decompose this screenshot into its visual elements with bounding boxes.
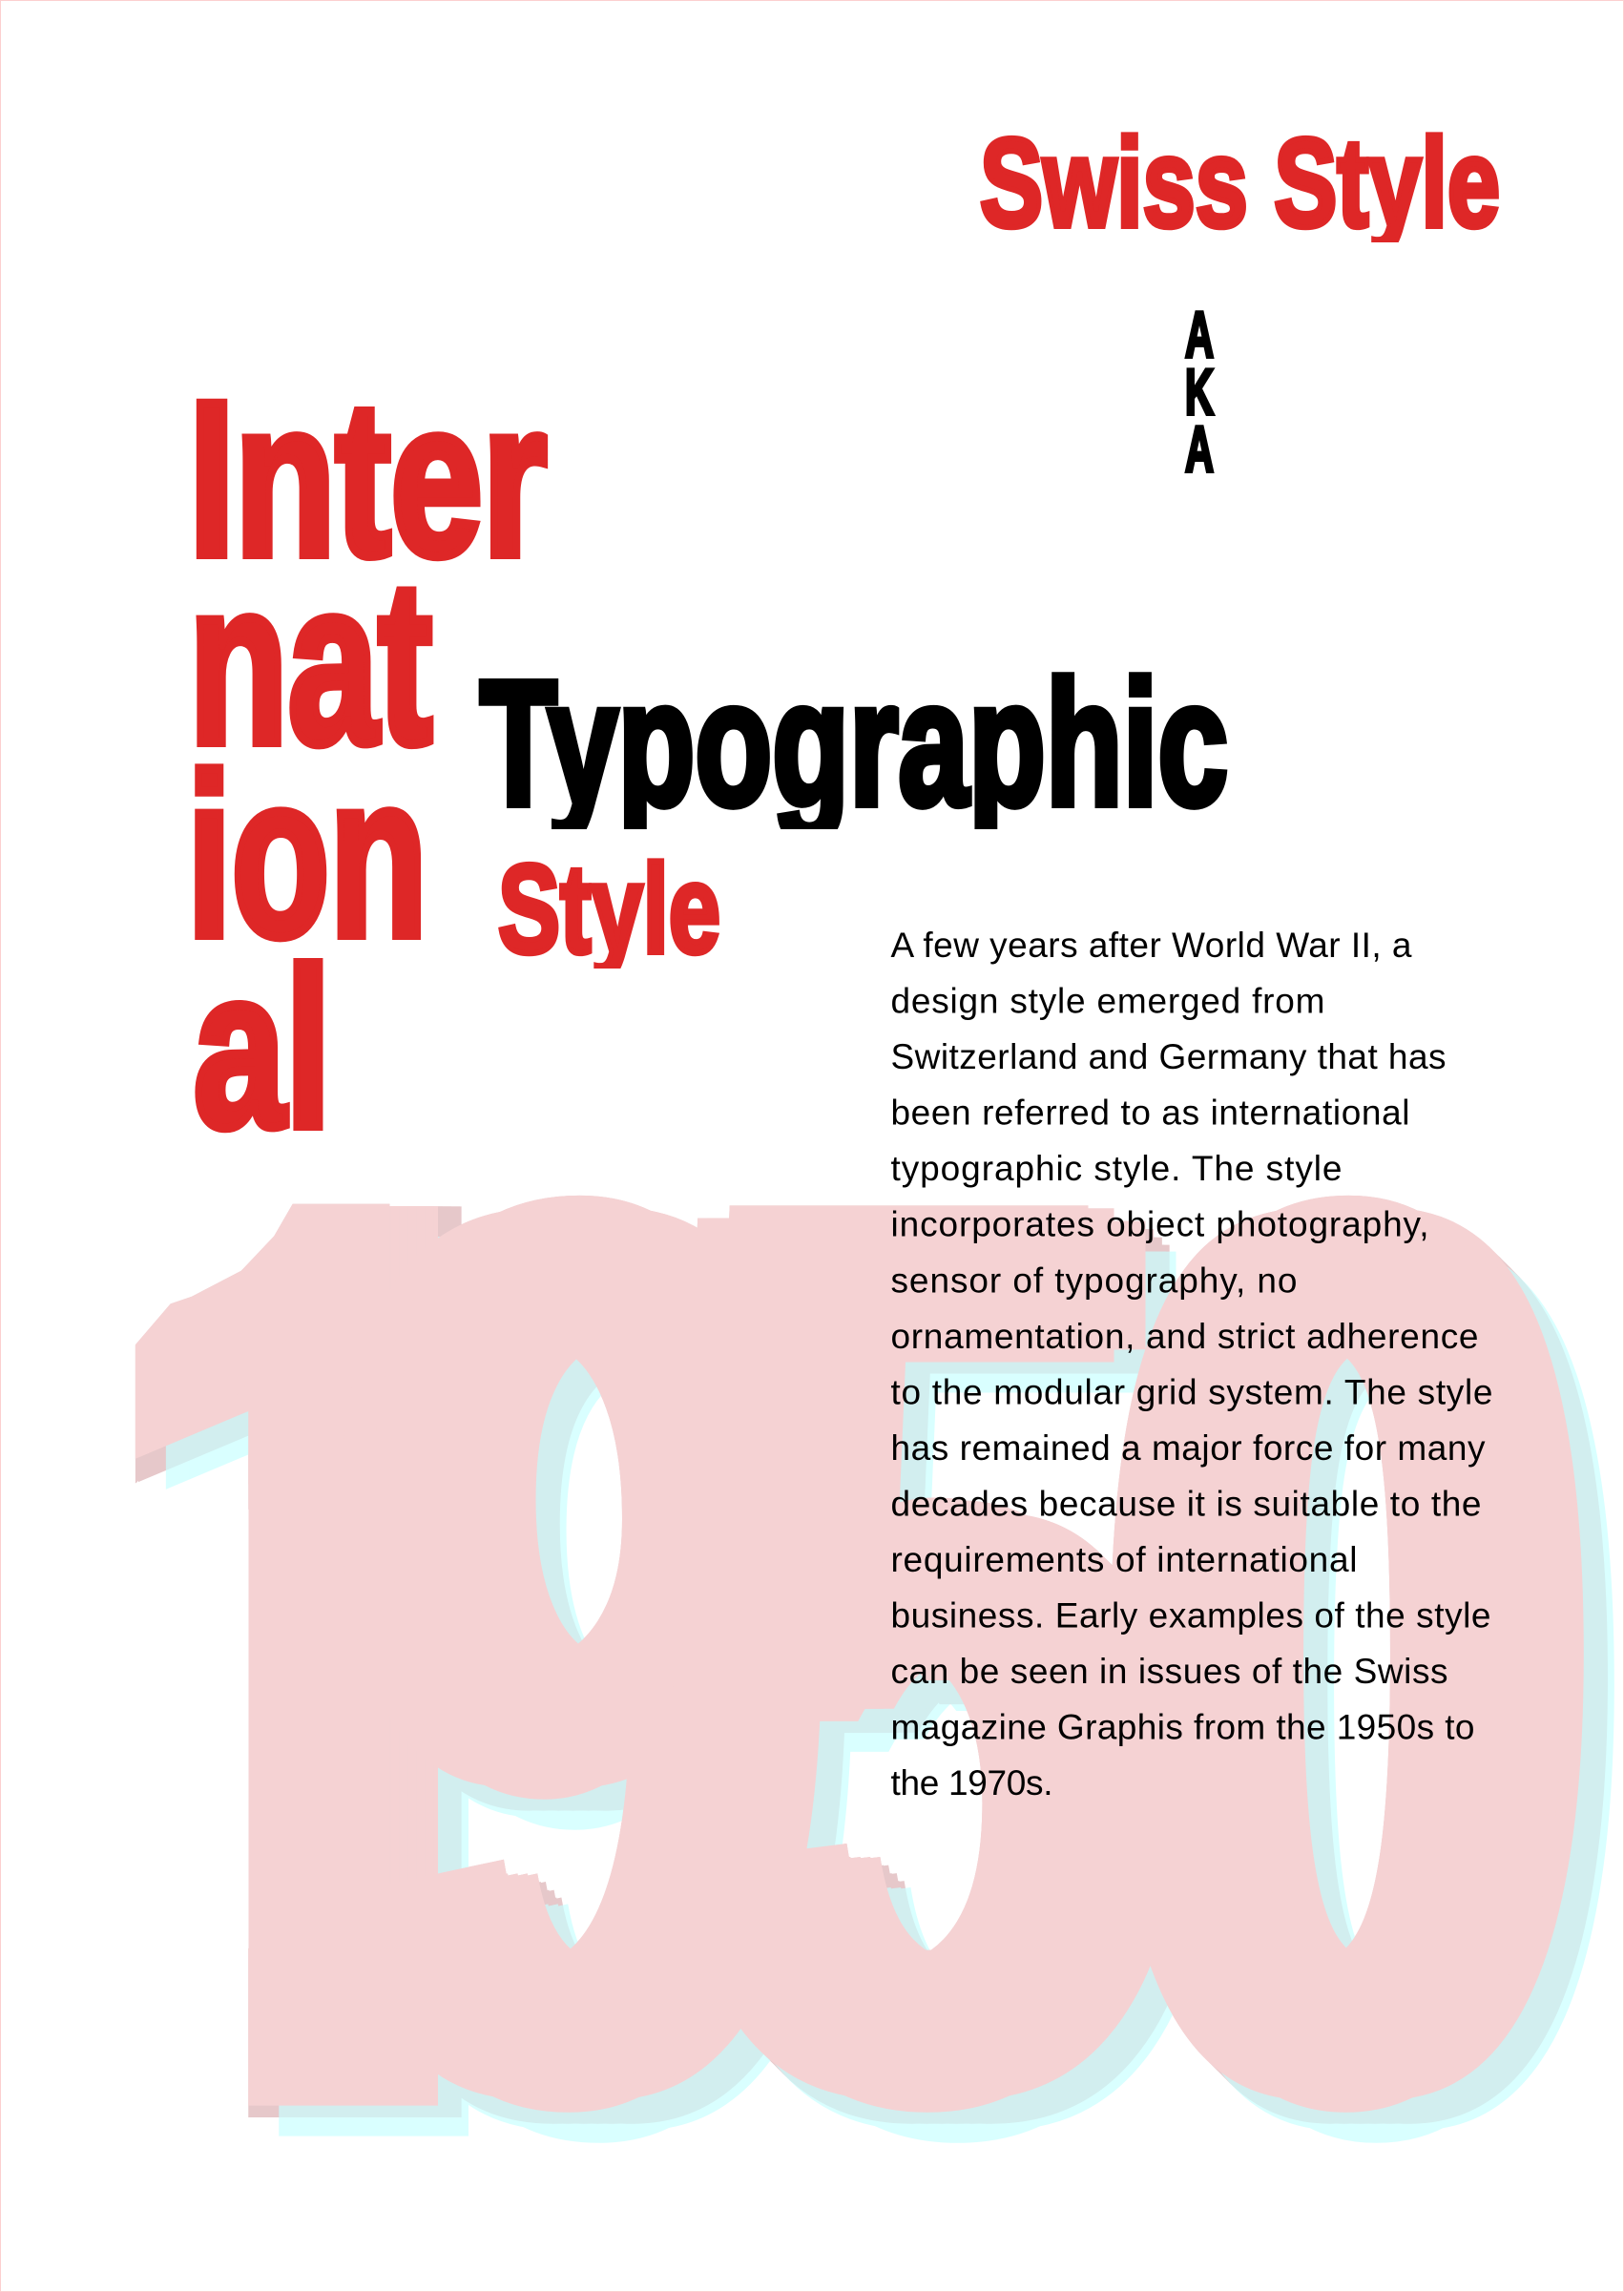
body paragraph: the 1970s. [891, 1763, 1053, 1802]
body paragraph: been referred to as international [891, 1094, 1410, 1133]
body paragraph: to the modular grid system. The style [891, 1372, 1492, 1411]
vertical label: AKA [1185, 299, 1214, 486]
heading: Typographic: Typographic [480, 645, 1228, 843]
body paragraph: design style emerged from [891, 981, 1324, 1021]
body paragraph: sensor of typography, no [891, 1261, 1298, 1300]
body paragraph: magazine Graphis from the 1950s to [891, 1708, 1475, 1747]
heading: Style: Style [498, 839, 720, 979]
body paragraph [891, 926, 1492, 1802]
heading: International broken over four lines: nat [189, 533, 432, 792]
cyan offset layer [166, 1237, 1614, 2143]
heading: International broken over four lines [187, 356, 547, 1175]
grey extrusion base layer [135, 1196, 1520, 2117]
body paragraph: A few years after World War II, a [891, 926, 1412, 965]
body paragraph: can be seen in issues of the Swiss [891, 1652, 1448, 1691]
pink numerals layer [135, 1196, 1584, 2113]
vertical label: AKA: A [1185, 413, 1214, 486]
body paragraph: ornamentation, and strict adherence [891, 1317, 1479, 1356]
heading: International broken over four lines: Inter [189, 356, 547, 601]
body paragraph: incorporates object photography, [891, 1205, 1429, 1244]
body paragraph: typographic style. The style [891, 1149, 1342, 1188]
body paragraph: Switzerland and Germany that has [891, 1037, 1447, 1076]
heading: International broken over four lines: ion [187, 728, 427, 985]
heading: International broken over four lines: al [194, 923, 331, 1175]
big year numerals 1950 with offset shadow layers [135, 1195, 1614, 2143]
vertical label: AKA: A [1185, 299, 1214, 371]
body paragraph: business. Early examples of the style [891, 1596, 1490, 1636]
body paragraph: requirements of international [891, 1540, 1357, 1579]
teal extrusion layer [135, 1206, 1608, 2124]
vertical label: AKA: K [1185, 356, 1214, 428]
headings and text [195, 132, 1499, 1796]
body paragraph: decades because it is suitable to the [891, 1485, 1481, 1523]
body paragraph: has remained a major force for many [891, 1428, 1486, 1468]
